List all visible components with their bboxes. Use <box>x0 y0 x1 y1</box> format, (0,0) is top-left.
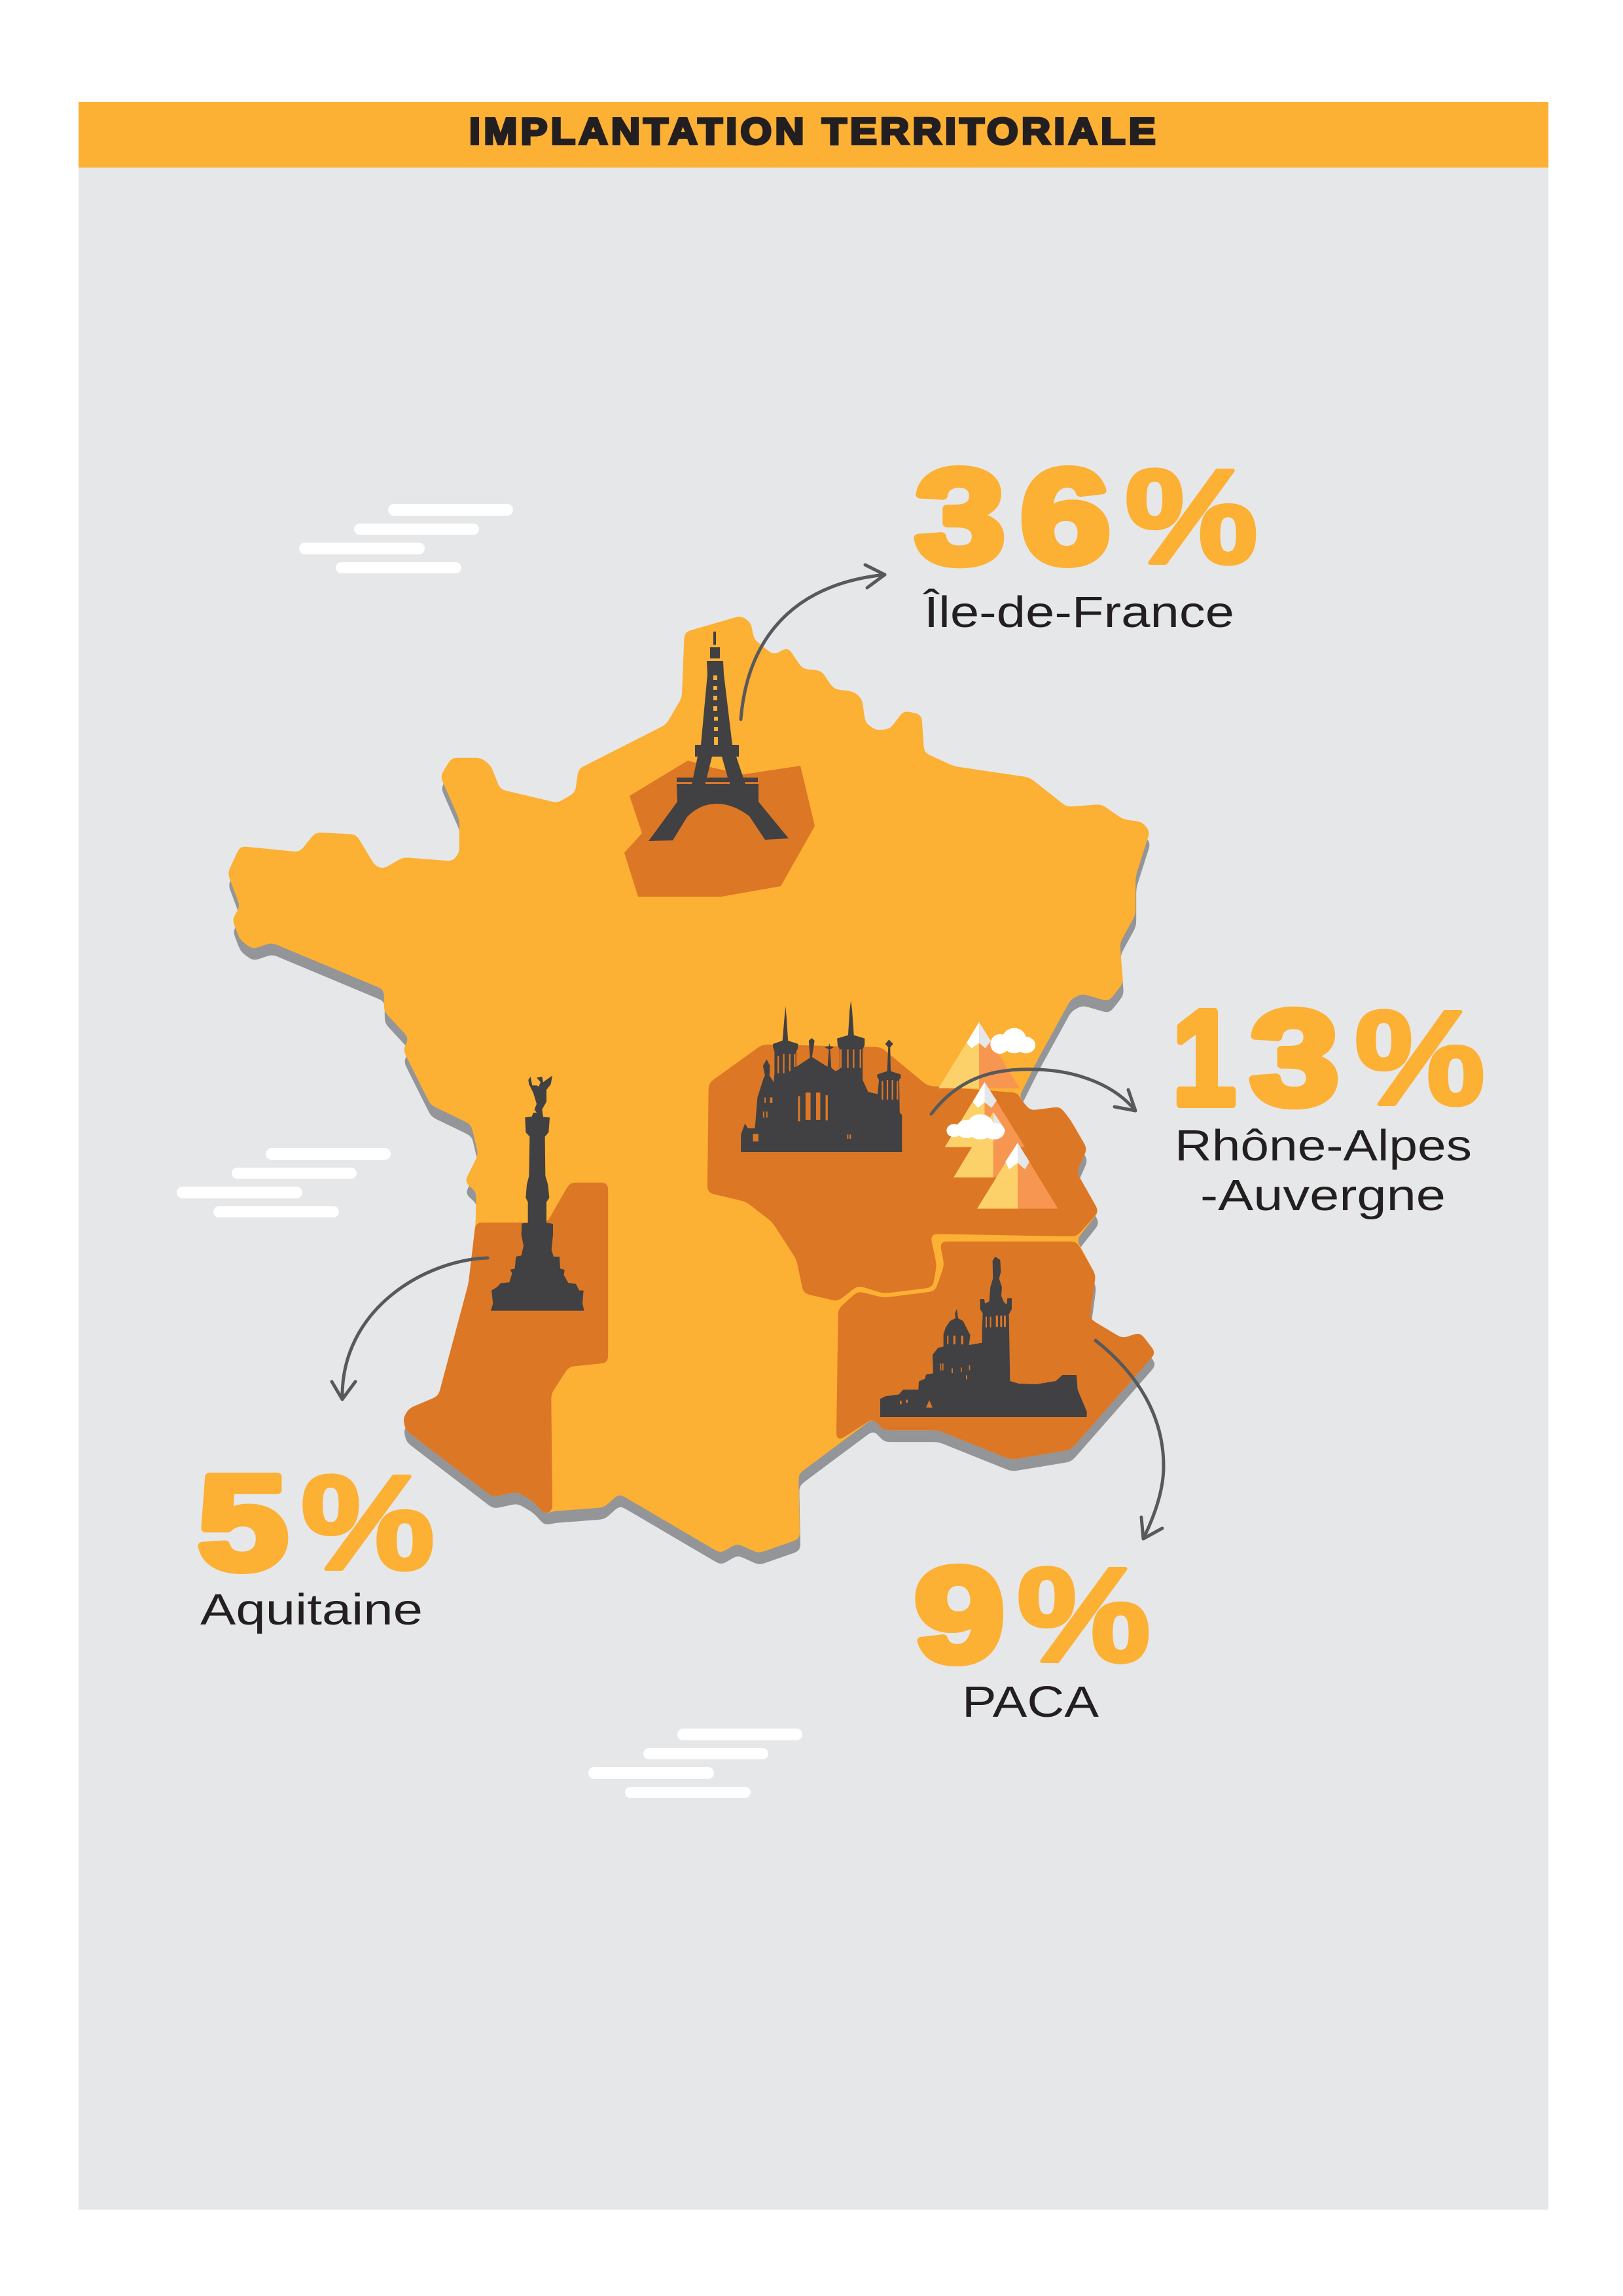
percentage 13%: 1 <box>1173 983 1236 1133</box>
percentage 36%: % <box>1125 442 1258 592</box>
icon: Eiffel Tower <box>649 632 789 841</box>
wind lines bottom <box>588 1729 802 1798</box>
wind lines top <box>299 504 513 573</box>
label Île-de-France: Île-de-France <box>923 588 1234 637</box>
map shadow <box>228 628 1156 1565</box>
arrow to Île-de-France <box>741 565 885 719</box>
label -Auvergne: -Auvergne <box>1200 1171 1446 1220</box>
percentage 9%: 9 <box>914 1540 1005 1690</box>
stat: Île-de-France <box>915 442 1258 637</box>
label PACA: PACA <box>962 1677 1099 1727</box>
region: Aquitaine <box>403 1183 608 1514</box>
label Aquitaine: Aquitaine <box>200 1585 423 1634</box>
stat: Rhône-Alpes-Auvergne <box>1173 983 1485 1220</box>
percentage 5%: % <box>301 1448 435 1598</box>
title banner <box>79 102 1548 168</box>
arrow to Aquitaine <box>332 1258 488 1399</box>
percentage 5%: 5 <box>198 1448 288 1598</box>
map of France <box>228 616 1156 1565</box>
wind lines left <box>177 1148 391 1217</box>
arrow to Rhône-Alpes-Auvergne <box>931 1069 1135 1114</box>
percentage 13%: 3 <box>1250 983 1339 1133</box>
icon: Fourvière basilica <box>741 1001 902 1152</box>
region: PACA <box>836 1242 1156 1460</box>
percentage 36%: 6 <box>1020 442 1111 592</box>
percentage 13%: % <box>1355 983 1485 1133</box>
title: IMPLANTATION TERRITORIALE <box>469 111 1159 152</box>
icon: Bordeaux column <box>491 1075 584 1311</box>
percentage 36%: 3 <box>915 442 1005 592</box>
percentage 9%: % <box>1017 1540 1150 1690</box>
label Rhône-Alpes: Rhône-Alpes <box>1175 1121 1472 1170</box>
region: Île-de-France <box>624 761 815 897</box>
icon: Notre-Dame de la Garde <box>880 1257 1087 1417</box>
region: Rhône-Alpes-Auvergne <box>707 1045 1099 1301</box>
arrow to PACA <box>1096 1340 1164 1539</box>
icon: mountains and clouds <box>938 1022 1058 1209</box>
cloud upper <box>990 1028 1035 1054</box>
cloud lower <box>946 1114 1005 1139</box>
stat: PACA <box>914 1540 1150 1727</box>
stat: Aquitaine <box>198 1448 435 1634</box>
map base <box>228 616 1156 1553</box>
